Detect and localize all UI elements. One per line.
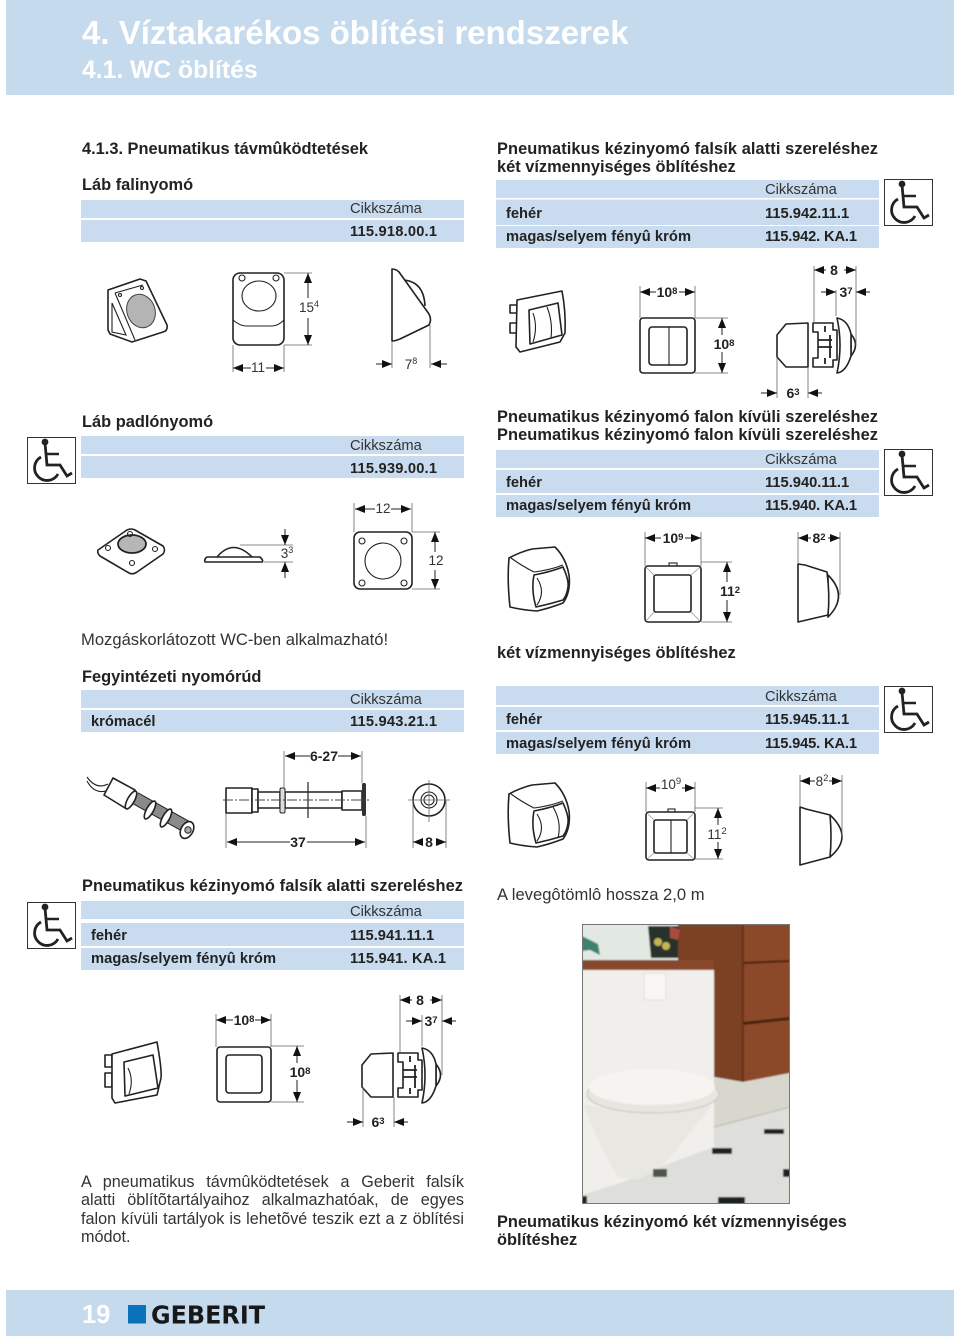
drawing: plate front: 10 bbox=[290, 1064, 305, 1080]
drawing: plate 3D bbox=[105, 1042, 161, 1103]
article table bbox=[496, 686, 879, 754]
page title: 4. Víztakarékos öblítési rendszerek bbox=[82, 14, 629, 51]
article table: 115.942. KA.1 bbox=[765, 229, 857, 245]
article table bbox=[81, 436, 464, 478]
drawing: floor pedal 3D bbox=[98, 529, 164, 574]
drawing: plate front: 10 bbox=[234, 1012, 249, 1028]
article table bbox=[81, 690, 464, 732]
note: hose length: A levegôtömlô hossza 2,0 m bbox=[497, 885, 705, 904]
drawing: floor pedal side: 3 bbox=[281, 546, 288, 561]
panel: Fegyintézeti nyomórúd bbox=[81, 668, 464, 850]
drawing: wall pedal 3D bbox=[108, 279, 167, 342]
panel: Láb falinyomó bbox=[81, 176, 464, 375]
article table: fehér bbox=[506, 206, 542, 222]
drawing: floor pedal top with dimensions bbox=[354, 501, 444, 589]
drawing: push rod side with dimensions: 6-27 bbox=[310, 748, 338, 764]
product heading: Pneumatikus kézinyomó falsík alatti szereléshez bbox=[497, 140, 878, 158]
article table: 115.942.11.1 bbox=[765, 206, 849, 222]
article table bbox=[496, 180, 879, 248]
article table: 115.941.11.1 bbox=[350, 928, 434, 944]
product heading: Pneumatikus kézinyomó falsík alatti szereléshez bbox=[82, 877, 463, 895]
article table: 115.945. KA.1 bbox=[765, 736, 857, 752]
drawing: surface box front bbox=[645, 530, 740, 622]
article table bbox=[81, 200, 464, 242]
drawing: push rod 3D bbox=[87, 777, 197, 841]
article table: 115.939.00.1 bbox=[350, 461, 437, 477]
description paragraph: alatti öblítõtartályaihoz alkalmazhatóak, de egyes bbox=[81, 1191, 464, 1209]
drawing: surface box front: 11 bbox=[720, 583, 735, 599]
drawing: wall pedal side with dimension: 8 bbox=[412, 356, 417, 366]
footer band bbox=[6, 1290, 954, 1336]
drawing: push rod end view bbox=[408, 780, 450, 850]
drawing: flush plate side: 3 bbox=[794, 387, 800, 398]
article table: Cikkszáma bbox=[765, 452, 838, 468]
drawing: two-button box front: 11 bbox=[707, 827, 721, 842]
drawing: wall pedal front with dimensions: 4 bbox=[314, 299, 319, 309]
description paragraph bbox=[81, 1173, 464, 1249]
article table: magas/selyem fényû króm bbox=[506, 498, 691, 514]
article table: Cikkszáma bbox=[350, 692, 423, 708]
article table: Cikkszáma bbox=[765, 182, 838, 198]
product heading: Pneumatikus kézinyomó falon kívüli szereléshez bbox=[497, 408, 878, 426]
article table: 115.943.21.1 bbox=[350, 714, 437, 730]
article table: 115.941. KA.1 bbox=[350, 951, 446, 967]
panel: falon kívüli bbox=[496, 408, 932, 622]
drawing: surface box front: 10 bbox=[663, 530, 678, 546]
drawing: flush plate front: 10 bbox=[657, 284, 672, 300]
article table: krómacél bbox=[91, 714, 156, 730]
drawing: floor pedal top with dimensions: 12 bbox=[428, 553, 444, 568]
photo caption: öblítéshez bbox=[497, 1231, 577, 1249]
article table: magas/selyem fényû króm bbox=[506, 736, 691, 752]
panel: Láb padlónyomó bbox=[28, 413, 464, 589]
drawing: floor pedal side: 3 bbox=[288, 545, 293, 555]
page subtitle: 4.1. WC öblítés bbox=[82, 57, 258, 84]
drawing: push rod end view: 8 bbox=[425, 834, 433, 850]
panel: two-volume surface bbox=[496, 644, 932, 904]
drawing: two-button box front: 2 bbox=[721, 826, 727, 837]
drawing: plate side: 6 bbox=[371, 1114, 379, 1130]
article table: fehér bbox=[506, 712, 542, 728]
drawing: floor pedal top with dimensions: 12 bbox=[375, 501, 391, 516]
drawing: flush plate front: 8 bbox=[672, 286, 677, 297]
drawing: flush plate side: 3 bbox=[839, 284, 847, 300]
drawing: two-button box 3D bbox=[508, 783, 569, 847]
drawing: plate front: 8 bbox=[249, 1014, 254, 1025]
drawing: two-button box side bbox=[800, 773, 842, 865]
drawing: plate side bbox=[347, 992, 456, 1130]
drawing: surface box side: 8 bbox=[812, 530, 820, 546]
product heading: Láb padlónyomó bbox=[82, 413, 213, 431]
article table bbox=[496, 450, 879, 517]
article table bbox=[81, 901, 464, 970]
drawing: plate side: 3 bbox=[379, 1116, 385, 1127]
article table: 115.918.00.1 bbox=[350, 224, 437, 240]
drawing: two-button box front: 10 bbox=[661, 777, 676, 792]
drawing: flush plate side: 7 bbox=[847, 286, 853, 297]
drawing: two-button box front bbox=[646, 776, 727, 860]
drawing: wall pedal side with dimension: 7 bbox=[405, 357, 412, 372]
drawing: surface box front: 9 bbox=[678, 532, 683, 543]
article table: fehér bbox=[91, 928, 127, 944]
drawing: two-button box side: 2 bbox=[823, 773, 828, 784]
drawing: surface box side bbox=[798, 530, 840, 622]
drawing: plate front: 8 bbox=[305, 1066, 310, 1077]
panel: falsík alatti two-volume bbox=[496, 140, 932, 401]
article table: Cikkszáma bbox=[350, 904, 423, 920]
product heading: két vízmennyiséges öblítéshez bbox=[497, 644, 736, 662]
product heading: Fegyintézeti nyomórúd bbox=[82, 668, 261, 686]
article table: Cikkszáma bbox=[350, 201, 423, 217]
article table: 115.940.11.1 bbox=[765, 475, 849, 491]
drawing: surface box 3D bbox=[508, 547, 569, 611]
article table: magas/selyem fényû króm bbox=[506, 229, 691, 245]
description paragraph: falon kívüli tartályok is lehetõvé teszik ezt a z öblítési bbox=[81, 1210, 464, 1228]
drawing: flush plate front: 8 bbox=[729, 338, 734, 349]
drawing: wall pedal front with dimensions bbox=[233, 273, 319, 375]
drawing: flush plate front: 10 bbox=[714, 336, 729, 352]
article table: Cikkszáma bbox=[765, 689, 838, 705]
product heading line two: két vízmennyiséges öblítéshez bbox=[497, 158, 736, 176]
drawing: wall pedal side with dimension bbox=[376, 269, 447, 372]
drawing: plate side: 7 bbox=[432, 1015, 438, 1026]
icon: wheelchair bbox=[884, 686, 932, 732]
drawing: flush plate front bbox=[640, 284, 734, 373]
article table: Cikkszáma bbox=[350, 438, 423, 454]
drawing: flush plate side: 8 bbox=[830, 262, 838, 278]
drawing: two-button box front: 9 bbox=[676, 776, 681, 787]
article table: 115.945.11.1 bbox=[765, 712, 849, 728]
drawing: plate side: 8 bbox=[416, 992, 424, 1008]
icon: wheelchair bbox=[28, 902, 76, 948]
product heading: Láb falinyomó bbox=[82, 176, 193, 194]
drawing: push rod side with dimensions bbox=[223, 748, 369, 850]
drawing: flush plate 3D bbox=[510, 291, 565, 352]
photo caption bbox=[497, 1213, 847, 1249]
icon: wheelchair bbox=[884, 180, 932, 226]
drawing: flush plate side bbox=[761, 262, 870, 401]
logo: Geberit: GEBERIT bbox=[151, 1300, 265, 1330]
product heading line two: Pneumatikus kézinyomó falon kívüli szereléshez bbox=[497, 426, 878, 444]
photo caption: Pneumatikus kézinyomó két vízmennyiséges bbox=[497, 1213, 847, 1231]
drawing: wall pedal front with dimensions: 11 bbox=[251, 360, 265, 375]
drawing: surface box front: 2 bbox=[735, 585, 740, 596]
article table: magas/selyem fényû króm bbox=[91, 951, 276, 967]
drawing: two-button box side: 8 bbox=[816, 774, 823, 789]
drawing: push rod side with dimensions: 37 bbox=[290, 834, 306, 850]
article table: fehér bbox=[506, 475, 542, 491]
note: accessible use: Mozgáskorlátozott WC-ben alkalmazható! bbox=[81, 630, 388, 649]
panel: falsík alatti single bbox=[28, 877, 464, 1130]
photo: wall-hung toilet bbox=[582, 924, 790, 1204]
drawing: plate side: 3 bbox=[424, 1013, 432, 1029]
drawing: surface box side: 2 bbox=[820, 532, 826, 543]
drawing: wall pedal front with dimensions: 15 bbox=[299, 300, 314, 315]
page number: 19 bbox=[82, 1301, 110, 1329]
section heading: 4.1.3. Pneumatikus távmûködtetések bbox=[82, 140, 369, 158]
drawing: flush plate side: 6 bbox=[786, 385, 794, 401]
icon: wheelchair bbox=[28, 438, 76, 484]
description paragraph: módot. bbox=[81, 1228, 130, 1246]
icon: wheelchair bbox=[884, 450, 932, 496]
drawing: floor pedal side bbox=[205, 529, 293, 578]
article table: 115.940. KA.1 bbox=[765, 498, 857, 514]
drawing: plate front bbox=[216, 1012, 310, 1102]
header band bbox=[6, 0, 954, 95]
description paragraph: A pneumatikus távmûködtetések a Geberit falsík bbox=[81, 1173, 464, 1191]
